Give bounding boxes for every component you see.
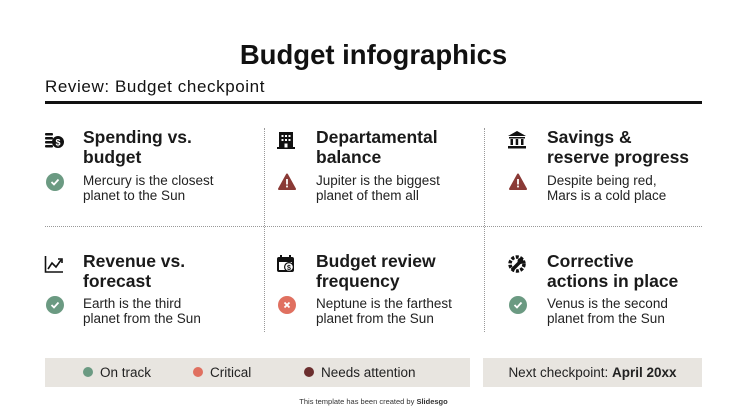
status: needs attention bbox=[278, 174, 296, 190]
description: planet from the Sun bbox=[316, 311, 434, 326]
panel: departamental balance bbox=[277, 127, 440, 203]
icon: building bbox=[277, 132, 295, 149]
title: Budget infographics bbox=[240, 39, 507, 70]
description: planet to the Sun bbox=[83, 188, 185, 203]
description: Jupiter is the biggest bbox=[316, 173, 440, 188]
heading bbox=[316, 251, 436, 291]
subtitle: Review: Budget checkpoint bbox=[45, 77, 265, 96]
heading: Revenue vs. bbox=[83, 251, 185, 271]
description: planet from the Sun bbox=[83, 311, 201, 326]
icon: coins: $ bbox=[55, 138, 61, 148]
description bbox=[316, 173, 440, 203]
panel: spending vs budget bbox=[45, 127, 214, 203]
panel: corrective actions bbox=[508, 251, 678, 326]
icon: calendar money: $ bbox=[287, 265, 291, 272]
description: planet from the Sun bbox=[547, 311, 665, 326]
legend: needs attention: Needs attention bbox=[321, 365, 416, 380]
status: on track bbox=[46, 296, 64, 314]
status: on track bbox=[509, 296, 527, 314]
heading: Corrective bbox=[547, 251, 634, 271]
description bbox=[547, 296, 668, 326]
description: Despite being red, bbox=[547, 173, 657, 188]
heading: balance bbox=[316, 147, 381, 167]
description: planet of them all bbox=[316, 188, 419, 203]
legend: critical: Critical bbox=[210, 365, 251, 380]
status: needs attention bbox=[509, 174, 527, 190]
icon: coins bbox=[45, 133, 64, 148]
description bbox=[316, 296, 452, 326]
description: Neptune is the farthest bbox=[316, 296, 452, 311]
description bbox=[547, 173, 666, 203]
legend: on track: On track bbox=[100, 365, 151, 380]
description bbox=[83, 296, 201, 326]
icon: calendar money bbox=[277, 255, 294, 272]
description bbox=[83, 173, 214, 203]
status: critical bbox=[278, 296, 296, 314]
panel: budget review frequency bbox=[277, 251, 452, 326]
heading bbox=[316, 127, 438, 167]
heading bbox=[83, 251, 185, 291]
description: Mars is a cold place bbox=[547, 188, 666, 203]
next checkpoint box bbox=[483, 358, 702, 387]
heading bbox=[547, 127, 689, 167]
icon: bank bbox=[508, 131, 526, 148]
heading: forecast bbox=[83, 271, 151, 291]
description: Venus is the second bbox=[547, 296, 668, 311]
panel: savings & reserve bbox=[508, 127, 689, 203]
heading: budget bbox=[83, 147, 141, 167]
heading: Departamental bbox=[316, 127, 438, 147]
heading: frequency bbox=[316, 271, 400, 291]
heading: Spending vs. bbox=[83, 127, 192, 147]
status: on track bbox=[46, 173, 64, 191]
icon: chart bbox=[44, 256, 63, 273]
description: Earth is the third bbox=[83, 296, 181, 311]
icon: gear wrench bbox=[508, 255, 526, 273]
next checkpoint box: Next checkpoint: April 20xx bbox=[508, 365, 677, 380]
panel: revenue vs forecast bbox=[44, 251, 201, 326]
heading bbox=[83, 127, 192, 167]
legend bbox=[45, 358, 470, 387]
heading: reserve progress bbox=[547, 147, 689, 167]
heading: Savings & bbox=[547, 127, 632, 147]
description: Mercury is the closest bbox=[83, 173, 214, 188]
heading: actions in place bbox=[547, 271, 678, 291]
heading: Budget review bbox=[316, 251, 436, 271]
footer credit: This template has been created by Slidesgo bbox=[299, 397, 448, 406]
heading bbox=[547, 251, 678, 291]
